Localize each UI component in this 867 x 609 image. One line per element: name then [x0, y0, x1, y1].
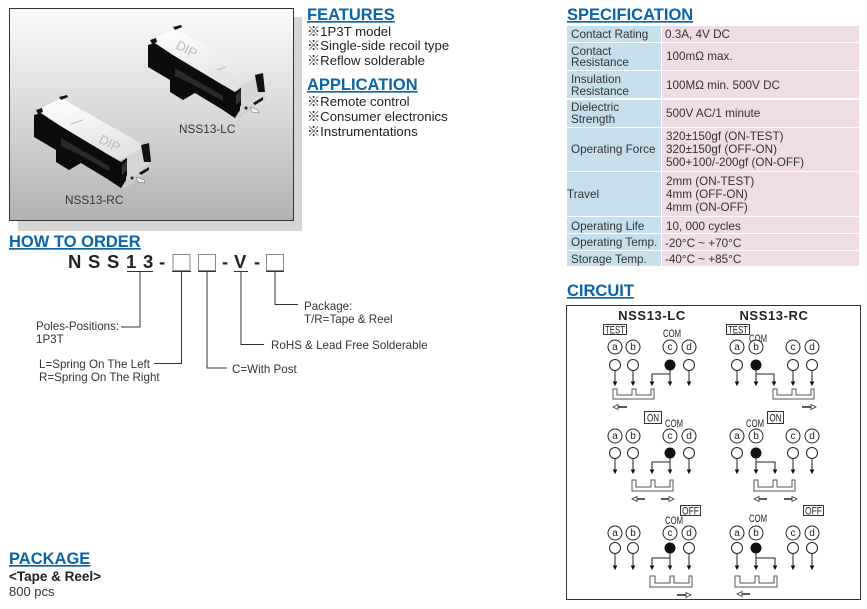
diagram: part number breakdown — [36, 251, 428, 384]
option: package — [304, 300, 393, 326]
option: spring side: R=Spring On The Right — [39, 371, 160, 384]
part number: V — [234, 251, 247, 272]
text: package detail — [9, 569, 101, 599]
circuit: LC test: TEST — [605, 324, 625, 336]
table: specification: Insulation — [571, 73, 621, 86]
text: application list — [307, 94, 448, 139]
table: specification: Strength — [571, 113, 615, 126]
circuit: RC off — [730, 506, 824, 596]
circuit: RC off: COM — [749, 513, 767, 525]
option: post: C=With Post — [232, 363, 298, 376]
circuit: LC test: c — [668, 342, 672, 353]
part number: N — [68, 251, 81, 272]
circuit: LC on: COM — [665, 418, 683, 430]
table: specification: Storage Temp. — [571, 253, 647, 266]
table: specification: Operating Temp. — [571, 236, 657, 249]
part number: S — [88, 251, 100, 272]
circuit: RC off: c — [790, 528, 796, 539]
image: NSS13-RC switch: DIP — [97, 131, 123, 155]
part number: S — [107, 251, 119, 272]
heading: features: FEATURES — [307, 6, 395, 24]
table: specification: 10, 000 cycles — [666, 220, 741, 233]
text: application list: ※Remote control — [307, 94, 410, 109]
text: package detail: 800 pcs — [9, 584, 55, 599]
table: specification: 320±150gf (OFF-ON) — [666, 143, 777, 156]
option: RoHS: RoHS & Lead Free Solderable — [271, 339, 428, 352]
label: NSS13-RC: NSS13-RC — [65, 193, 124, 207]
circuit: LC on: d — [686, 431, 692, 442]
table: specification: Operating Force — [571, 143, 655, 156]
option: package: Package: — [304, 300, 352, 313]
table: specification: 500V AC/1 minute — [666, 107, 760, 120]
circuit: RC on: a — [734, 431, 740, 442]
option: spring side: L=Spring On The Left — [39, 358, 151, 371]
circuit: RC test: a — [734, 342, 740, 353]
panel: circuit — [566, 306, 860, 600]
circuit: RC on: b — [753, 431, 759, 442]
title: NSS13-RC: NSS13-RC — [739, 308, 809, 323]
table: specification: 100MΩ min. 500V DC — [666, 79, 780, 92]
circuit: RC on: d — [809, 431, 815, 442]
table: specification: -20°C ~ +70°C — [665, 237, 741, 250]
option: poles-positions — [36, 320, 119, 346]
circuit: LC off: OFF — [682, 506, 699, 518]
circuit: RC test — [726, 324, 819, 410]
table: specification: 4mm (OFF-ON) — [666, 188, 748, 201]
table: specification: 0.3A, 4V DC — [665, 28, 730, 41]
leader lines — [121, 271, 298, 368]
table: specification: Contact — [571, 45, 612, 58]
circuit: RC off: d — [809, 528, 815, 539]
circuit: LC off: b — [630, 528, 636, 539]
table: specification: 2mm (ON-TEST) — [666, 175, 754, 188]
table: specification: 4mm (ON-OFF) — [666, 201, 748, 214]
circuit: RC test: TEST — [728, 324, 748, 336]
circuit: LC off — [608, 506, 700, 598]
option: spring side — [39, 358, 160, 384]
circuit: LC on: a — [612, 431, 618, 442]
table: specification: Resistance — [571, 56, 629, 69]
text: application list: ※Instrumentations — [307, 124, 418, 139]
circuit: LC test: b — [630, 342, 636, 353]
text: package detail: <Tape & Reel> — [9, 569, 101, 584]
text: features list — [307, 24, 449, 68]
circuit: RC on: c — [790, 431, 796, 442]
circuit: LC test: d — [686, 342, 692, 353]
table: specification: Dielectric — [571, 101, 619, 114]
table: specification: -40°C ~ +85°C — [665, 253, 741, 266]
circuit: RC off: OFF — [805, 506, 822, 518]
image: NSS13-RC switch — [34, 95, 151, 189]
circuit: LC off: COM — [665, 515, 683, 527]
heading: specification: SPECIFICATION — [567, 6, 693, 24]
circuit: LC on: c — [668, 431, 672, 442]
label: NSS13-LC: NSS13-LC — [179, 122, 236, 136]
circuit: RC on: COM — [746, 418, 764, 430]
text: features list: ※Reflow solderable — [307, 53, 425, 68]
heading: how to order: HOW TO ORDER — [9, 233, 141, 251]
table: specification: Contact Rating — [571, 28, 648, 41]
panel: product photo — [10, 8, 302, 231]
circuit: LC test — [604, 324, 696, 410]
circuit: RC on: ON — [770, 412, 782, 424]
part number: - — [159, 251, 165, 272]
title: NSS13-LC: NSS13-LC — [618, 308, 686, 323]
part number: 3 — [143, 251, 153, 272]
part number — [68, 251, 284, 272]
circuit: LC off: a — [612, 528, 618, 539]
circuit: RC test: b — [753, 342, 759, 353]
part number: 1 — [126, 251, 136, 272]
circuit: LC test: COM — [663, 328, 681, 340]
circuit: LC off: c — [668, 528, 672, 539]
text: application list: ※Consumer electronics — [307, 109, 448, 124]
heading: circuit: CIRCUIT — [567, 282, 634, 300]
image: NSS13-LC switch — [148, 25, 265, 119]
circuit: RC off: b — [753, 528, 759, 539]
circuit: LC test: a — [612, 342, 618, 353]
circuit: LC on: b — [630, 431, 636, 442]
circuit: RC on — [730, 412, 819, 502]
text: features list: ※Single-side recoil type — [307, 38, 449, 53]
option: poles-positions: 1P3T — [36, 333, 64, 346]
option: package: T/R=Tape & Reel — [304, 313, 393, 326]
circuit: RC off: a — [734, 528, 740, 539]
table: specification: 320±150gf (ON-TEST) — [666, 130, 784, 143]
table: specification: 500+100/-200gf (ON-OFF) — [666, 156, 804, 169]
table: specification — [567, 26, 859, 266]
circuit: LC on — [608, 412, 696, 502]
option: poles-positions: Poles-Positions: — [36, 320, 119, 333]
circuit: LC on: ON — [647, 412, 659, 424]
circuit: RC test: d — [809, 342, 815, 353]
text: features list: ※1P3T model — [307, 24, 391, 39]
circuit: RC test: COM — [749, 333, 767, 345]
circuit: RC test: c — [790, 342, 796, 353]
table: specification: Operating Life — [571, 220, 644, 233]
circuit: LC off: d — [686, 528, 692, 539]
heading: package: PACKAGE — [9, 550, 90, 568]
part number: - — [254, 251, 260, 272]
table: specification: 100mΩ max. — [666, 50, 733, 63]
part number: - — [222, 251, 228, 272]
table: specification: Resistance — [571, 85, 629, 98]
image: NSS13-LC switch: DIP — [174, 37, 200, 61]
heading: application: APPLICATION — [307, 76, 418, 94]
table: specification: Travel — [567, 188, 599, 201]
